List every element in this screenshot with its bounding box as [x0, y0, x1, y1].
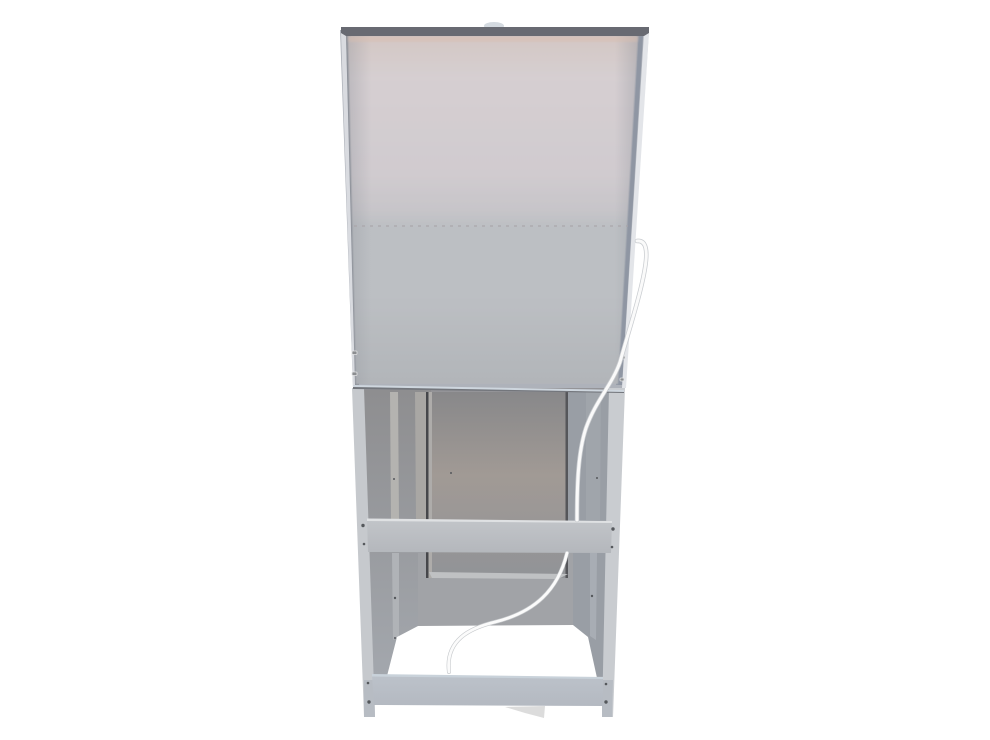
- bolts: [361, 472, 615, 704]
- middle crossbar: [367, 518, 612, 553]
- upper panel: [340, 27, 649, 393]
- right post: [602, 388, 625, 717]
- top rim: [341, 27, 649, 36]
- panel face: [348, 36, 638, 384]
- white power cable: [449, 241, 646, 672]
- floor opening: [387, 625, 597, 678]
- side flanges: [340, 30, 649, 388]
- lower frame: [352, 388, 625, 718]
- rear door panel: [426, 392, 568, 579]
- scrap under base: [505, 706, 545, 718]
- interior back wall: [363, 388, 612, 680]
- warm top glow: [348, 36, 638, 42]
- screws: [352, 351, 625, 381]
- panel edge shading: [348, 36, 638, 384]
- left post: [352, 388, 375, 717]
- cable stub above top edge: [484, 22, 504, 30]
- bottom flange: [353, 385, 624, 392]
- bottom crossbar: [372, 674, 603, 706]
- rivet line: [354, 225, 628, 227]
